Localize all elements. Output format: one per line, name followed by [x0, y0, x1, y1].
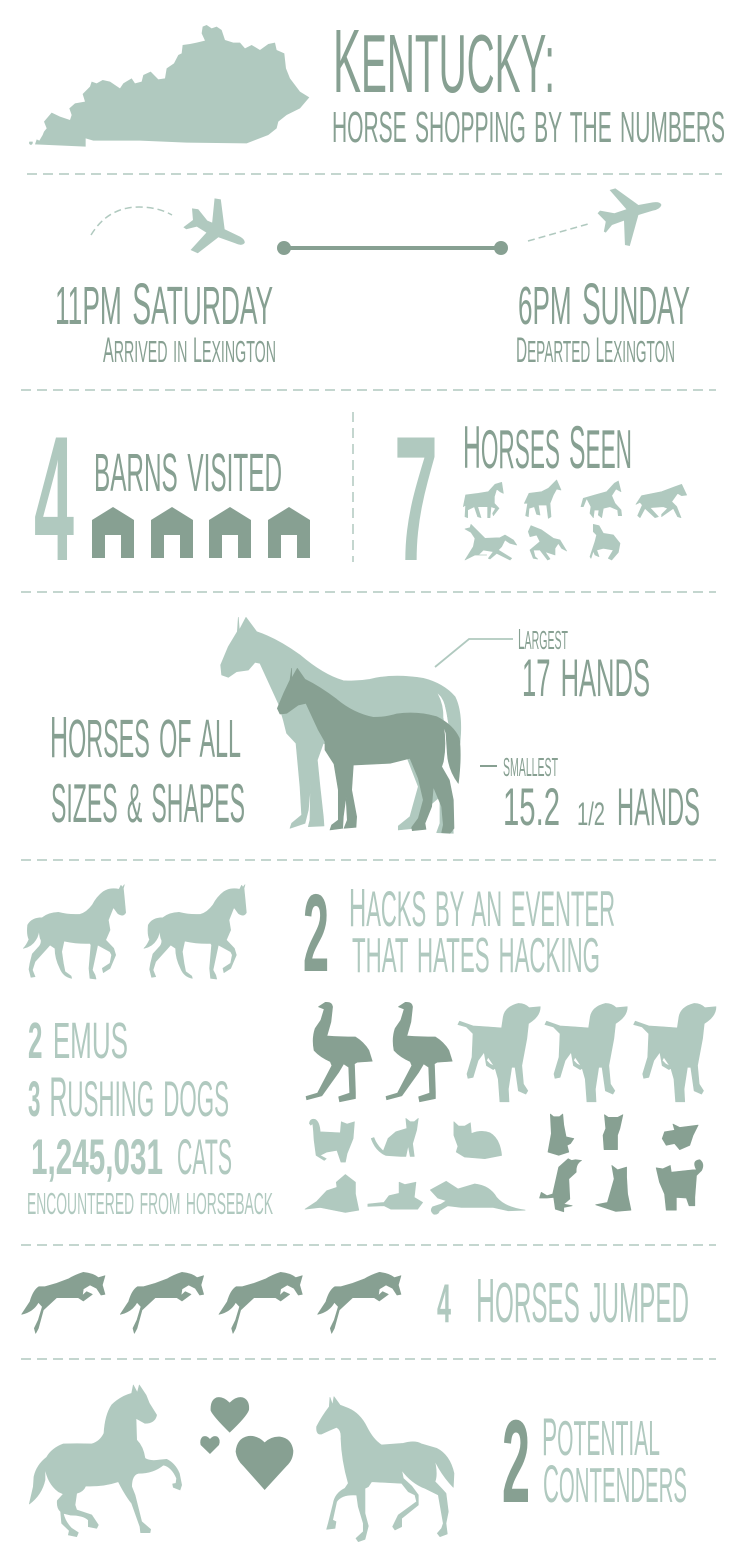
timeline connector [277, 241, 508, 255]
text: departure time [516, 272, 690, 370]
stat: 4 horses jumped [437, 1267, 689, 1336]
text: animals encountered: 2 EMUS [28, 1012, 128, 1069]
stat: 4 horses jumped: 4 [437, 1272, 451, 1334]
icon: two hacking horses [23, 885, 246, 979]
text: animals encountered [27, 1012, 273, 1221]
icon: rearing contender horse [29, 1385, 182, 1537]
icon: light cats [305, 1118, 525, 1214]
text: animals encountered: 3 RUSHING DOGS [28, 1065, 229, 1128]
icon: four jumping horses [22, 1272, 401, 1333]
stat: 4 barns visited: 4 [34, 399, 74, 598]
stat: 2 potential contenders: 2 [502, 1396, 530, 1528]
icon: walking contender horse [317, 1397, 454, 1542]
text: animals encountered: CATS [177, 1129, 232, 1185]
text: arrival time [55, 272, 276, 370]
callout: smallest 15.2 1/2 hands [480, 752, 700, 837]
text: animals encountered: 1,245,031 [31, 1129, 163, 1185]
callout: largest 17 hands: LARGEST [518, 624, 568, 656]
stat: 7 horses seen: HORSES SEEN [463, 414, 632, 481]
icon: seven small horses [463, 480, 687, 560]
stat: 7 horses seen [394, 399, 687, 598]
stat: 2 potential contenders [502, 1396, 687, 1528]
text: HORSES OF ALL [50, 705, 241, 770]
callout: smallest 15.2 1/2 hands: 1/2 [577, 796, 605, 832]
title [332, 12, 725, 152]
icon: two emus [306, 1002, 452, 1102]
icon: four barns [92, 507, 310, 558]
callout: smallest 15.2 1/2 hands: 15.2 [503, 778, 560, 837]
stat: 2 hacks [303, 872, 615, 995]
icon: three dogs [458, 1003, 716, 1102]
stat: 2 hacks: 2 [303, 872, 329, 995]
icon: departing plane with dashed trail [528, 188, 661, 246]
text: arrival time: ARRIVED IN LEXINGTON [103, 331, 276, 370]
text: arrival time: 11PM SATURDAY [55, 272, 273, 337]
icon: dark cats [540, 1114, 703, 1212]
text: SIZES & SHAPES [51, 772, 245, 834]
stat: 7 horses seen: 7 [394, 399, 438, 598]
stat: 4 barns visited [34, 399, 310, 598]
icon: large and small horse silhouettes [221, 617, 461, 833]
icon: Kentucky state map [29, 25, 309, 147]
icon: three hearts [200, 1397, 293, 1490]
callout: largest 17 hands [435, 624, 650, 708]
stat: 4 barns visited: BARNS VISITED [94, 443, 282, 503]
icon: arriving plane with dashed trail [91, 198, 245, 253]
text: ENCOUNTERED FROM HORSEBACK [27, 1186, 273, 1221]
heading: horses of all sizes and shapes [50, 705, 245, 834]
callout: smallest 15.2 1/2 hands: SMALLEST [503, 752, 558, 782]
